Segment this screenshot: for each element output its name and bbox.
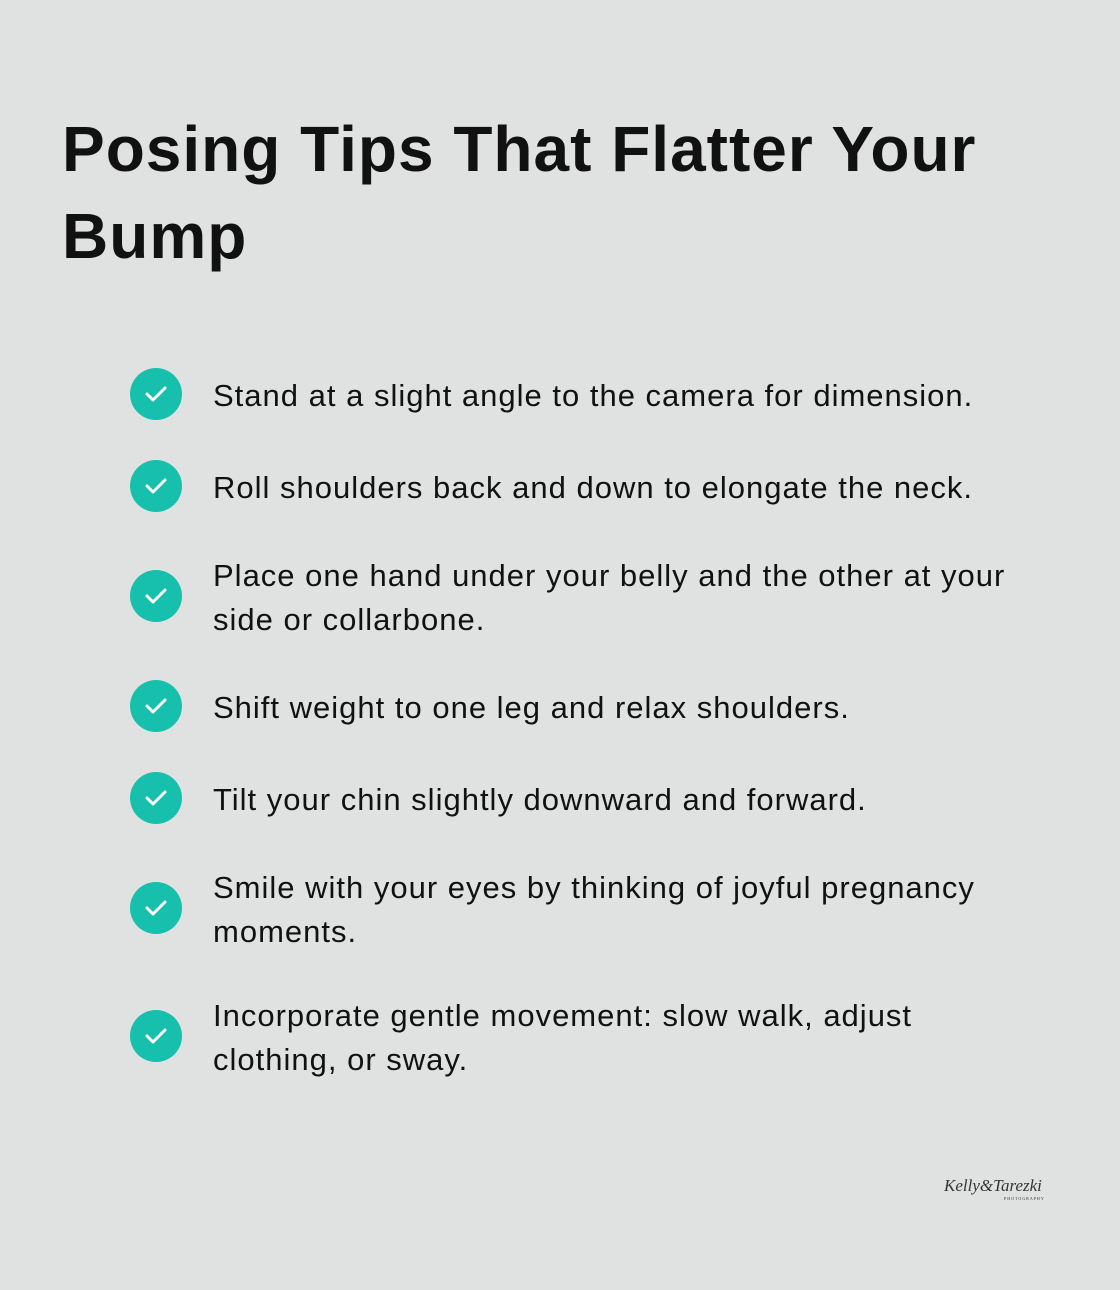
item 3: side or collarbone. — [213, 602, 485, 636]
item 5: Tilt your chin slightly downward and forward. — [213, 782, 867, 816]
item 2 — [130, 460, 973, 512]
item 2: Roll shoulders back and down to elongate the neck. — [213, 470, 973, 504]
item 7 — [130, 998, 912, 1076]
item 7: clothing, or sway. — [213, 1042, 468, 1076]
item 3 — [130, 558, 1005, 636]
item 7: Incorporate gentle movement: slow walk, adjust — [213, 998, 912, 1032]
title: Bump — [62, 200, 247, 272]
item 1: Stand at a slight angle to the camera for dimension. — [213, 378, 973, 412]
title: Posing Tips That Flatter Your — [62, 113, 976, 185]
item 4: Shift weight to one leg and relax shoulders. — [213, 690, 850, 724]
item 4 — [130, 680, 850, 732]
item 1 — [130, 368, 973, 420]
item 6: Smile with your eyes by thinking of joyful pregnancy — [213, 870, 975, 904]
item 6 — [130, 870, 975, 948]
signature logo: PHOTOGRAPHY — [1004, 1196, 1045, 1201]
signature logo: Kelly&Tarezki — [944, 1176, 1042, 1195]
item 3: Place one hand under your belly and the other at your — [213, 558, 1005, 592]
title — [62, 113, 976, 272]
item 6: moments. — [213, 914, 357, 948]
item 5 — [130, 772, 867, 824]
